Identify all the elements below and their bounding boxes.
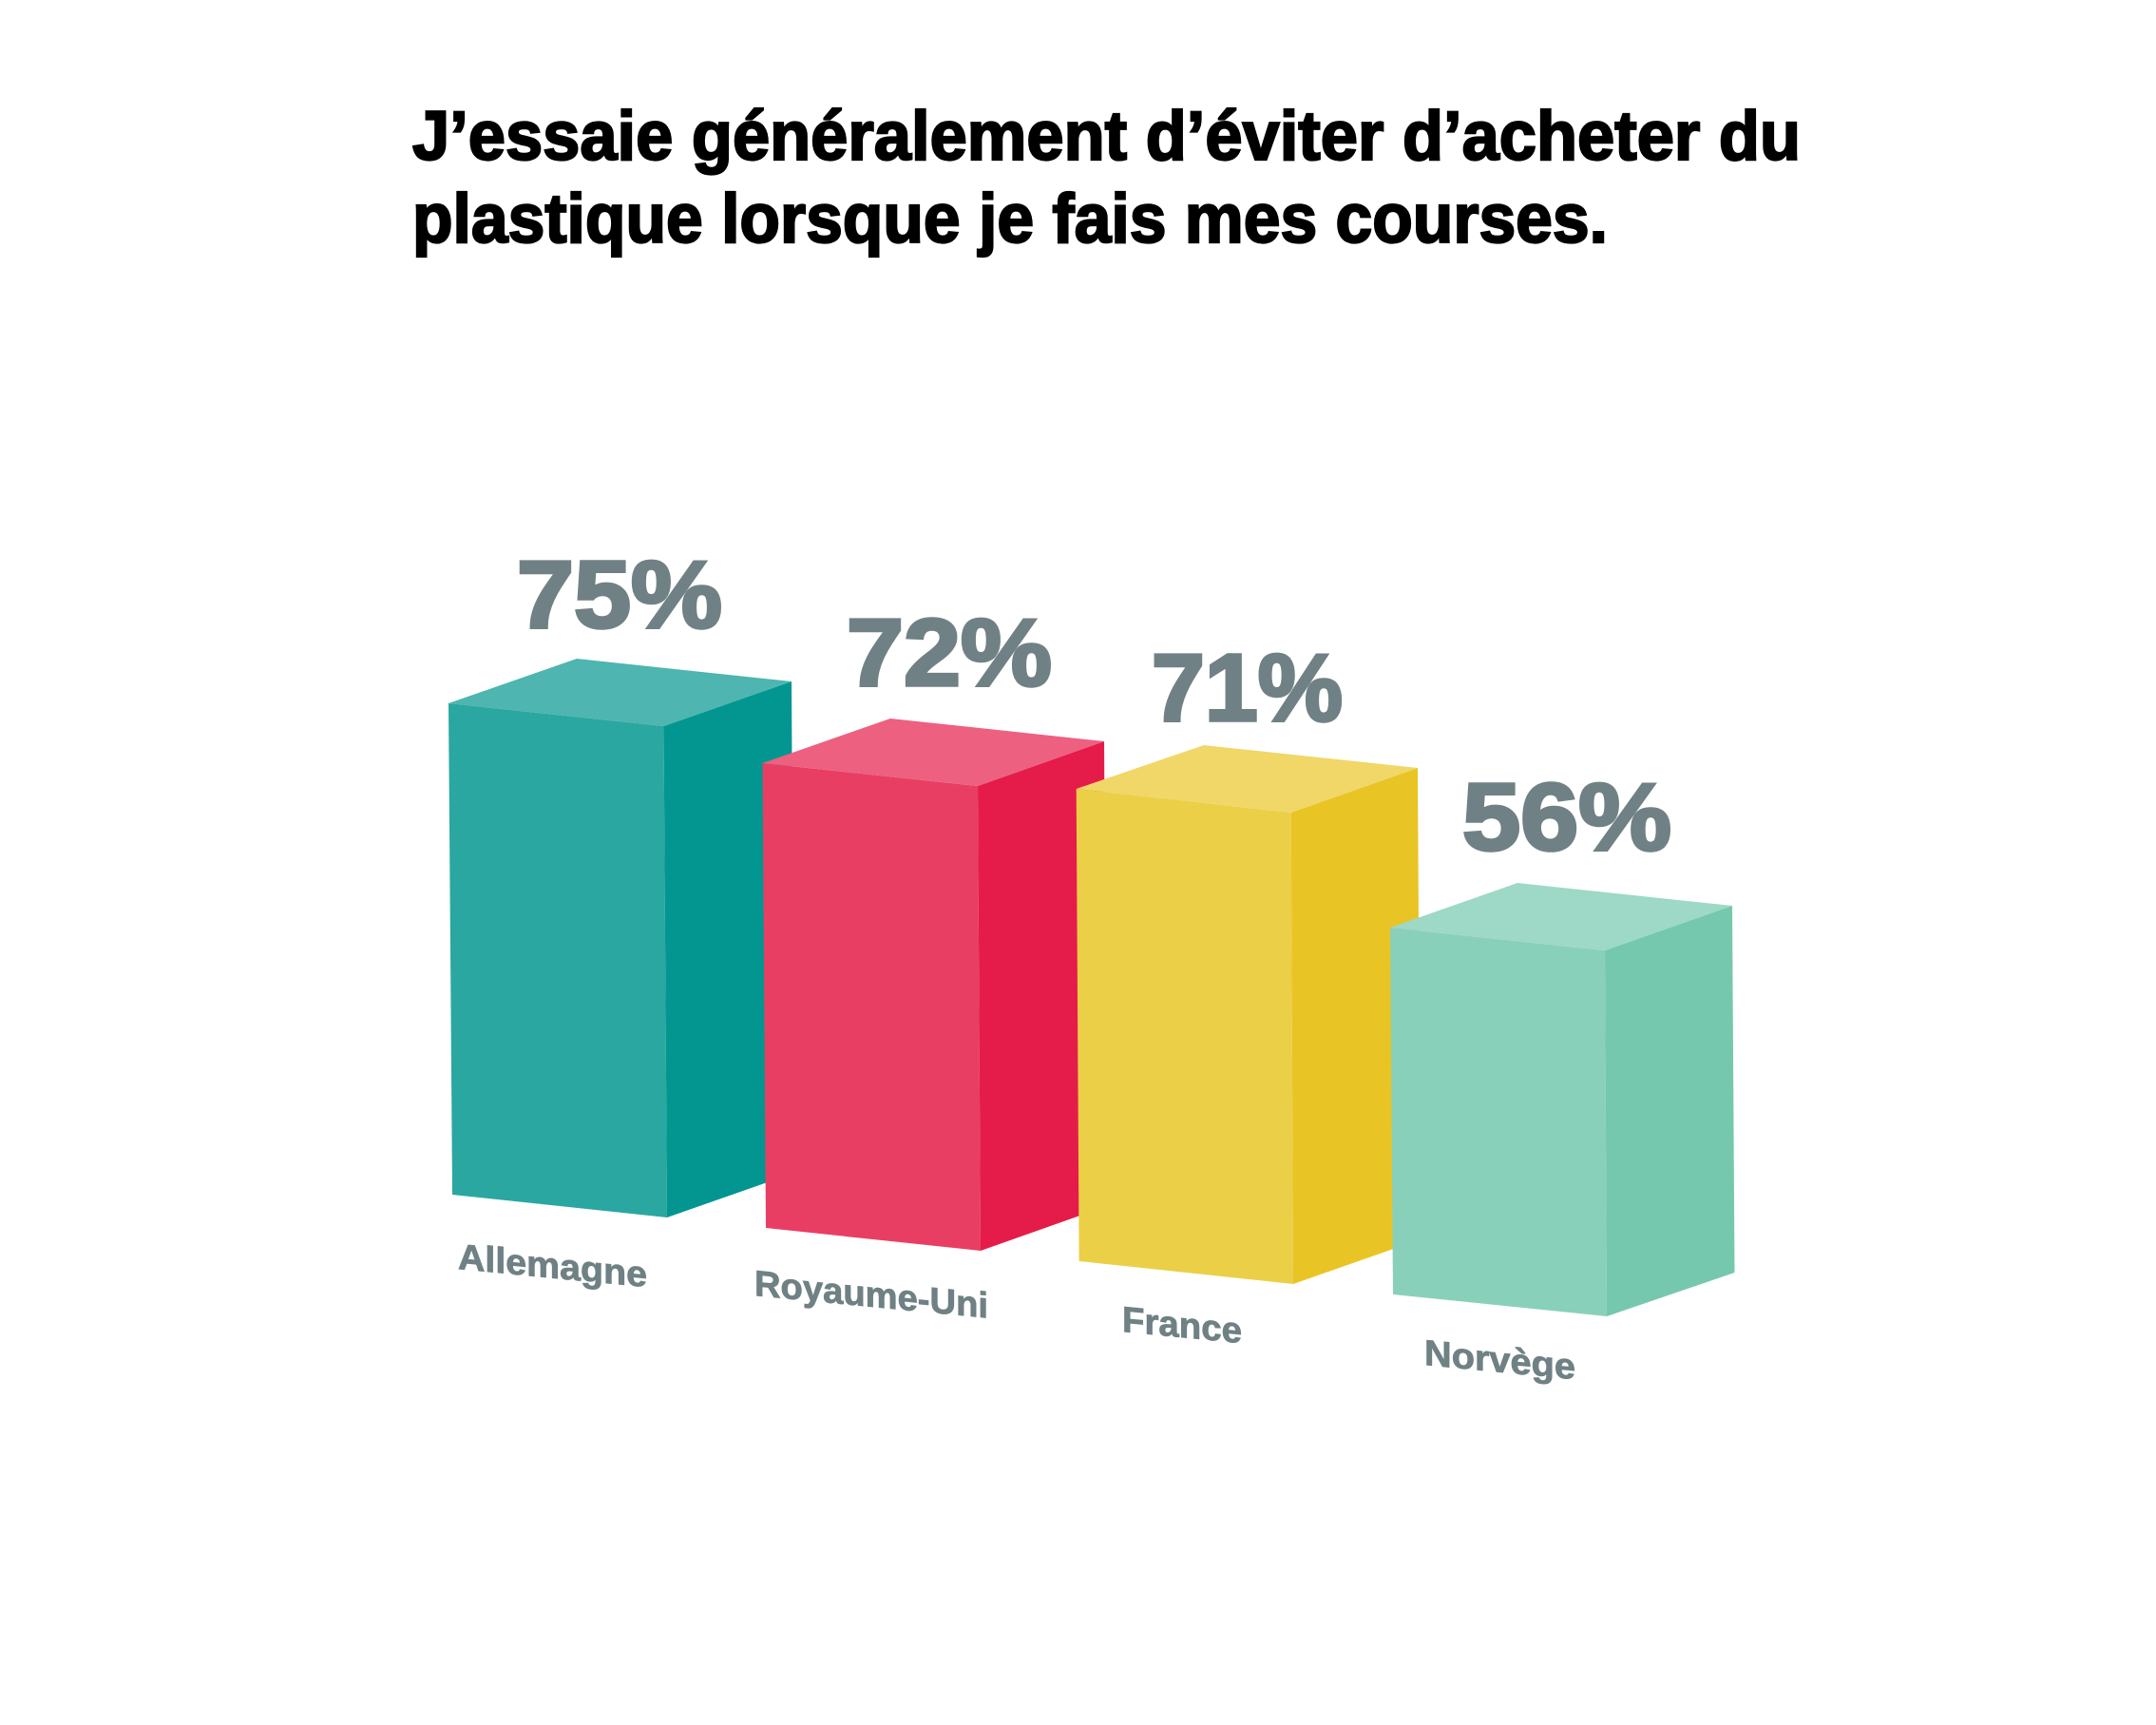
label: Norvège: Norvège bbox=[1424, 1333, 1575, 1388]
title: plastique lorsque je fais mes courses. bbox=[412, 181, 1608, 258]
value: Allemagne 75%: 75% bbox=[517, 542, 722, 648]
label: Allemagne: Allemagne bbox=[458, 1237, 647, 1295]
label: France: France bbox=[1122, 1300, 1242, 1351]
bar: Allemagne bbox=[448, 659, 794, 1217]
value: Royaume-Uni 72%: 72% bbox=[847, 600, 1052, 706]
value: France 71%: 71% bbox=[1152, 635, 1343, 741]
bar chart bbox=[448, 659, 1735, 1316]
value: Norvège 56%: 56% bbox=[1462, 764, 1671, 871]
title: J’essaie généralement d’éviter d’acheter du bbox=[412, 98, 1801, 175]
bar: France bbox=[1077, 745, 1421, 1284]
bar: Royaume-Uni bbox=[762, 719, 1107, 1251]
bar: Norvège bbox=[1390, 883, 1735, 1316]
title bbox=[412, 98, 1801, 258]
label: Royaume-Uni: Royaume-Uni bbox=[754, 1264, 988, 1327]
